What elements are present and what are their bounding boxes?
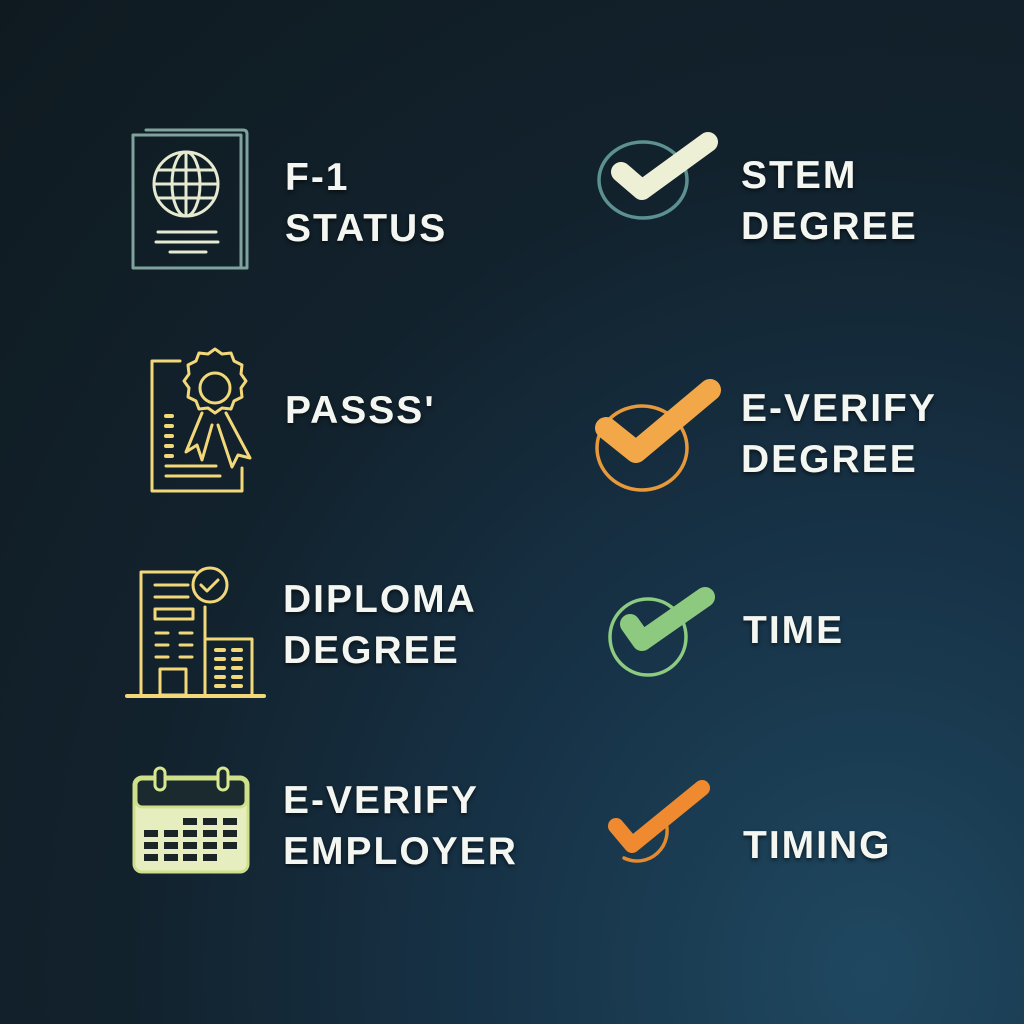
label: STEM DEGREE: STEM: [741, 154, 857, 197]
icon: certificate: [152, 349, 250, 491]
icon: check TIME: [610, 597, 705, 675]
label: PASSS': PASSS': [285, 389, 436, 432]
label: E-VERIFY EMPLOYER: [283, 779, 518, 873]
icon: passport: [133, 130, 247, 268]
icon: check E-VERIFY: [597, 390, 710, 490]
label: E-VERIFY DEGREE: [741, 387, 937, 481]
label: DIPLOMA DEGREE: DEGREE: [283, 629, 460, 672]
icon: check TIMING: [616, 788, 702, 861]
label: F-1 STATUS: [285, 156, 447, 250]
label: F-1 STATUS: STATUS: [285, 207, 447, 250]
label: F-1 STATUS: F-1: [285, 156, 350, 199]
label: E-VERIFY DEGREE: DEGREE: [741, 438, 918, 481]
label: STEM DEGREE: [741, 154, 918, 248]
label: TIME: TIME: [743, 609, 844, 652]
icon: building: [127, 568, 264, 696]
label: STEM DEGREE: DEGREE: [741, 205, 918, 248]
label: DIPLOMA DEGREE: DIPLOMA: [283, 578, 477, 621]
icon: calendar: [134, 768, 248, 872]
label: E-VERIFY DEGREE: E-VERIFY: [741, 387, 937, 430]
label: DIPLOMA DEGREE: [283, 578, 477, 672]
label: E-VERIFY EMPLOYER: EMPLOYER: [283, 830, 518, 873]
icon: check STEM: [599, 142, 708, 218]
label: TIMING: TIMING: [743, 824, 891, 867]
label: E-VERIFY EMPLOYER: E-VERIFY: [283, 779, 479, 822]
